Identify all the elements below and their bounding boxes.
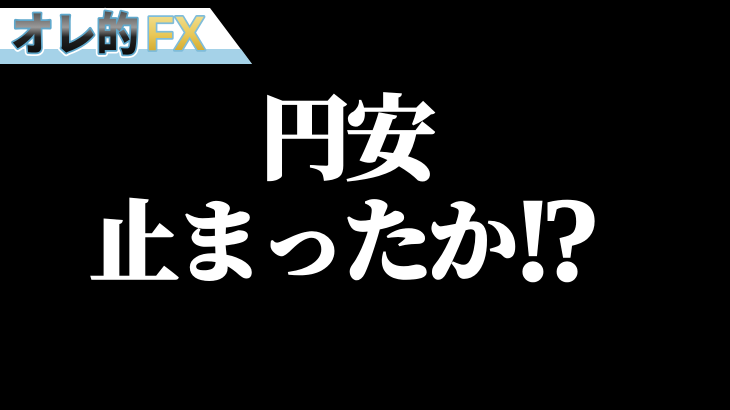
headline line 2: 止まったか: [89, 171, 518, 302]
headline question mark: ?: [541, 173, 601, 306]
logo text: FX: FX: [146, 8, 205, 61]
banner: logo strip: [0, 0, 252, 64]
headline: [89, 67, 601, 306]
headline exclamation mark: !: [513, 173, 553, 306]
headline line 1: 円安: [259, 67, 439, 199]
